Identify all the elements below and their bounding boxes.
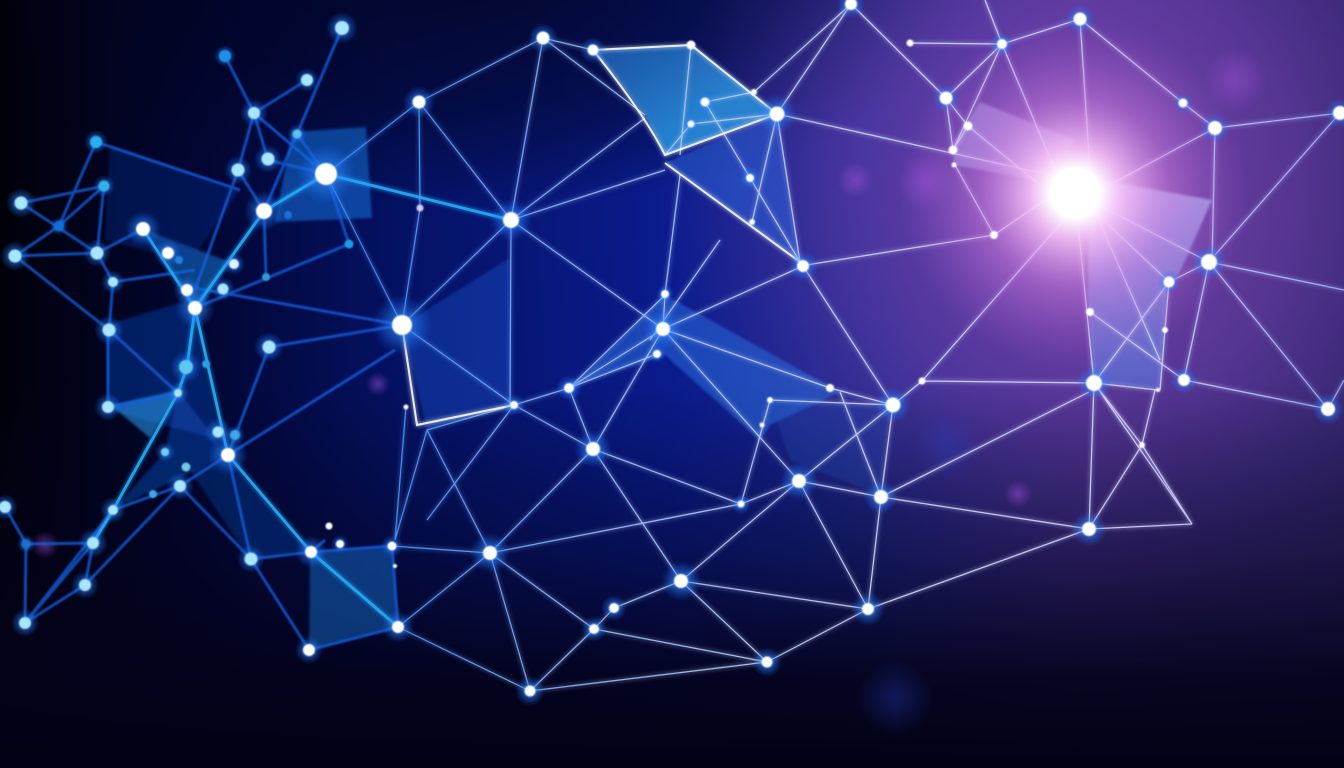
network edges: left cluster [5,28,402,650]
translucent glass panes [105,45,1212,650]
network edges: right mesh [851,0,1344,609]
bright pane outlines [402,45,800,425]
light flare [890,10,1260,380]
network edges: central mesh [326,4,1050,691]
node cores: left cluster [0,21,354,629]
bright cyan strands: left cluster [93,174,511,627]
